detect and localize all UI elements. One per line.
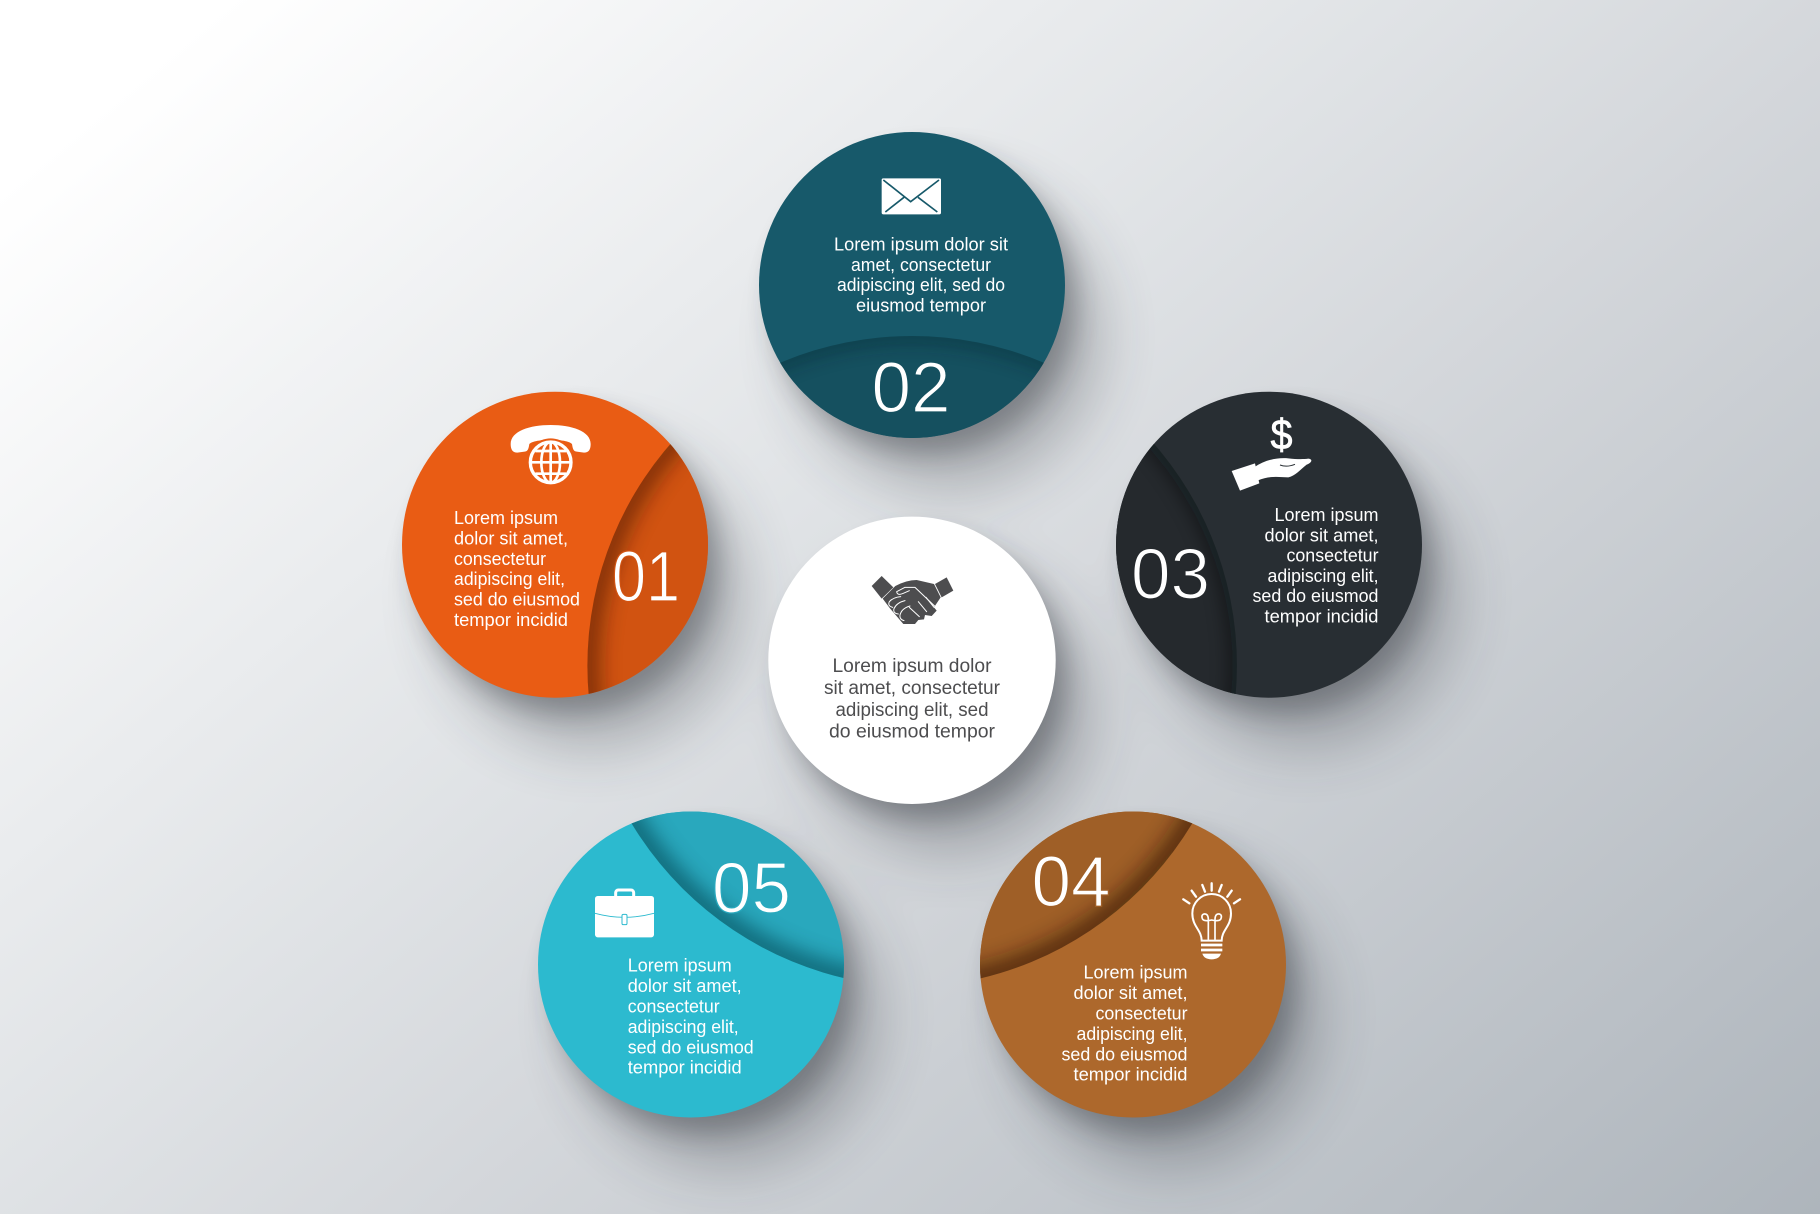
- text block 02: eiusmod tempor: [856, 294, 986, 315]
- drop shadows under circles: [416, 151, 1454, 1165]
- text block 01: consectetur: [454, 548, 546, 569]
- text block 02: amet, consectetur: [851, 254, 991, 275]
- panel: step 03 charcoal circle: [1116, 392, 1422, 698]
- text block centre: do eiusmod tempor: [829, 722, 996, 742]
- text block 01: sed do eiusmod: [454, 589, 580, 610]
- number 03: 03: [1131, 536, 1210, 614]
- text block 01: adipiscing elit,: [454, 568, 565, 589]
- text block 05: Lorem ipsum: [628, 955, 732, 976]
- circle base 03: [1116, 392, 1422, 698]
- text block 03: tempor incidid: [1264, 605, 1378, 626]
- text block centre: sit amet, consectetur: [824, 678, 1001, 699]
- text block 05: consectetur: [628, 996, 720, 1016]
- text block 02: [834, 234, 1008, 315]
- circle base centre: [768, 517, 1056, 804]
- text block 05: [628, 955, 754, 1078]
- text block 01: [454, 507, 580, 630]
- circle base 04: [980, 812, 1286, 1118]
- number 05: 05: [712, 850, 791, 929]
- text block 04: dolor sit amet,: [1074, 982, 1188, 1003]
- icon: dollar sign: $: [1270, 411, 1293, 459]
- text block centre: [824, 656, 1001, 742]
- text block 03: dolor sit amet,: [1264, 524, 1378, 545]
- text block 03: [1252, 504, 1378, 626]
- text block centre: adipiscing elit, sed: [836, 700, 988, 721]
- text block 03: consectetur: [1286, 545, 1378, 566]
- text block 01: dolor sit amet,: [454, 527, 568, 548]
- panel: centre white circle: [768, 517, 1056, 804]
- circle base 02: [759, 132, 1065, 438]
- text block 04: tempor incidid: [1074, 1064, 1188, 1085]
- text block 04: [1062, 962, 1188, 1085]
- text block 04: Lorem ipsum: [1084, 962, 1188, 983]
- number 02: 02: [872, 349, 950, 428]
- curved tab 01: [587, 444, 708, 694]
- icon: light bulb: [1183, 883, 1240, 959]
- text block 04: sed do eiusmod: [1062, 1043, 1188, 1064]
- icon: handshake: [872, 576, 953, 624]
- curved tab 02: [780, 336, 1044, 438]
- text block centre: Lorem ipsum dolor: [832, 656, 992, 677]
- panel: step 05 cyan circle: [538, 812, 844, 1118]
- circle base 05: [538, 812, 844, 1118]
- text block 05: sed do eiusmod: [628, 1036, 754, 1057]
- icon: hand holding dollar: [1232, 458, 1311, 491]
- icon: briefcase: [595, 890, 654, 937]
- curved tab 03: [1116, 444, 1237, 694]
- text block 01: Lorem ipsum: [454, 507, 558, 528]
- icon: envelope: [882, 178, 941, 214]
- text block 02: Lorem ipsum dolor sit: [834, 234, 1008, 254]
- circle base 01: [402, 392, 708, 698]
- text block 03: Lorem ipsum: [1274, 504, 1378, 525]
- number 01: 01: [612, 538, 680, 617]
- panel: step 02 teal circle: [759, 132, 1065, 438]
- text block 04: consectetur: [1096, 1002, 1188, 1024]
- curved tab 05: [632, 812, 844, 978]
- number 04: 04: [1032, 843, 1110, 922]
- text block 02: adipiscing elit, sed do: [837, 274, 1005, 295]
- curved tab 04: [980, 812, 1192, 978]
- text block 04: adipiscing elit,: [1076, 1023, 1188, 1044]
- text block 03: sed do eiusmod: [1252, 585, 1378, 606]
- text block 05: dolor sit amet,: [628, 975, 742, 996]
- text block 03: adipiscing elit,: [1268, 565, 1378, 586]
- panel: step 01 orange circle: [402, 392, 708, 698]
- icon: telephone with globe: [511, 425, 591, 486]
- panel: step 04 brown circle: [980, 812, 1286, 1118]
- text block 01: tempor incidid: [454, 609, 568, 630]
- text block 05: adipiscing elit,: [628, 1016, 739, 1037]
- text block 05: tempor incidid: [628, 1057, 742, 1078]
